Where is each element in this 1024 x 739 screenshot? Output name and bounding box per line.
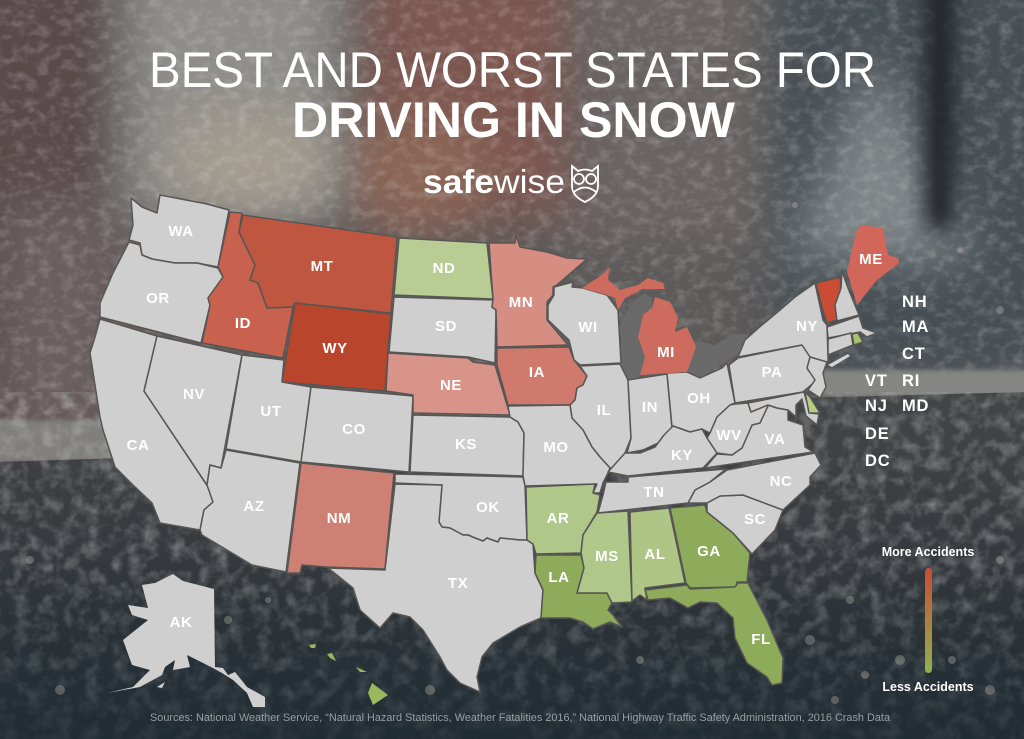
state: Iowa: IA bbox=[529, 364, 545, 381]
state: Wisconsin: WI bbox=[578, 319, 598, 336]
state: Wyoming: WY bbox=[322, 340, 348, 357]
state: New Mexico bbox=[287, 463, 394, 573]
state: Delaware bbox=[805, 392, 820, 413]
small state labels list: VT bbox=[865, 372, 888, 390]
state: Maine bbox=[847, 225, 899, 305]
state: Tennessee bbox=[598, 469, 726, 513]
state: California bbox=[90, 319, 213, 530]
state: Missouri bbox=[508, 405, 610, 493]
state: Virginia bbox=[705, 405, 813, 468]
state: South Carolina bbox=[707, 495, 783, 554]
state: Pennsylvania bbox=[729, 345, 817, 403]
state: Georgia bbox=[670, 505, 750, 588]
state: Oregon: OR bbox=[146, 290, 170, 307]
state: North Dakota bbox=[394, 238, 493, 299]
state: Michigan: MI bbox=[657, 344, 675, 361]
small state labels list: NJ bbox=[865, 397, 888, 415]
state: Iowa bbox=[497, 347, 587, 405]
state: Alabama: AL bbox=[644, 546, 666, 563]
state: Colorado bbox=[301, 387, 413, 472]
logo: safewise: safewise bbox=[423, 163, 565, 200]
state: Rhode Island bbox=[852, 333, 863, 345]
state: Texas bbox=[328, 484, 543, 692]
state: Illinois: IL bbox=[597, 402, 611, 419]
small state labels list: MD bbox=[902, 397, 929, 415]
small state labels list: DC bbox=[865, 452, 890, 470]
state: Wisconsin bbox=[548, 282, 621, 365]
state: Kentucky bbox=[608, 426, 717, 476]
state: Georgia: GA bbox=[697, 543, 721, 560]
small state labels list bbox=[865, 293, 929, 470]
state: Tennessee: TN bbox=[643, 484, 665, 501]
state: Virginia: VA bbox=[765, 431, 785, 448]
small state labels list: DE bbox=[865, 425, 890, 443]
title: BEST AND WORST STATES FOR bbox=[149, 42, 876, 98]
state: Alaska: AK bbox=[170, 614, 192, 631]
state: Hawaii bbox=[309, 644, 388, 705]
small state labels list: CT bbox=[902, 345, 926, 363]
state: South Carolina: SC bbox=[744, 511, 766, 528]
state: Idaho bbox=[202, 212, 293, 358]
state: Kansas bbox=[410, 415, 524, 476]
state: Maine: ME bbox=[859, 251, 883, 268]
map: lakes overlay bbox=[621, 293, 748, 380]
state: Idaho: ID bbox=[235, 315, 251, 332]
small state labels list: MA bbox=[902, 318, 929, 336]
state: Montana: MT bbox=[311, 258, 333, 275]
state: Pennsylvania: PA bbox=[762, 364, 782, 381]
state: Colorado: CO bbox=[342, 421, 366, 438]
state: Vermont bbox=[816, 277, 841, 323]
state: Arkansas bbox=[526, 484, 600, 554]
state: Maryland bbox=[748, 392, 819, 425]
state: Mississippi bbox=[577, 511, 632, 603]
small state labels list: RI bbox=[902, 372, 920, 390]
legend: accident scale bbox=[882, 545, 974, 694]
state: West Virginia: WV bbox=[716, 427, 742, 444]
state: South Dakota bbox=[389, 297, 496, 363]
state: Washington bbox=[129, 195, 229, 267]
state: Montana bbox=[239, 215, 397, 313]
state: Wyoming bbox=[282, 303, 391, 391]
state: Indiana bbox=[627, 374, 672, 453]
legend gradient bar bbox=[925, 568, 932, 673]
map: contiguous states bbox=[90, 195, 899, 692]
state: Louisiana bbox=[535, 555, 622, 629]
state: Alaska bbox=[107, 574, 265, 707]
state: New Jersey bbox=[807, 357, 827, 398]
state: Kentucky: KY bbox=[671, 447, 693, 464]
state: North Carolina bbox=[688, 453, 821, 510]
state: Alabama bbox=[630, 508, 685, 601]
state: New York: NY bbox=[796, 318, 818, 335]
state: Minnesota bbox=[489, 235, 587, 347]
state: Oklahoma bbox=[395, 474, 527, 542]
state: Washington: WA bbox=[168, 223, 194, 240]
state: Kansas: KS bbox=[455, 436, 477, 453]
state: Missouri: MO bbox=[543, 439, 569, 456]
state: Illinois bbox=[570, 364, 631, 473]
state: Massachusetts bbox=[827, 316, 877, 338]
state: Florida: FL bbox=[751, 631, 771, 648]
state: Nevada bbox=[144, 336, 242, 485]
title bbox=[149, 42, 876, 148]
state: Arizona: AZ bbox=[243, 498, 265, 515]
state: Ohio: OH bbox=[687, 390, 711, 407]
state: Minnesota: MN bbox=[509, 294, 533, 311]
title: DRIVING IN SNOW bbox=[292, 92, 736, 148]
state: Utah: UT bbox=[260, 403, 282, 420]
legend: accident scale: Less Accidents bbox=[882, 680, 974, 694]
state: Florida bbox=[645, 583, 783, 685]
state: New Mexico: NM bbox=[327, 510, 351, 527]
state: South Dakota: SD bbox=[435, 318, 457, 335]
state: Utah bbox=[226, 355, 311, 462]
state: Nevada: NV bbox=[183, 386, 205, 403]
legend: accident scale: More Accidents bbox=[882, 545, 974, 559]
state: Nebraska: NE bbox=[440, 377, 462, 394]
state: North Carolina: NC bbox=[770, 473, 792, 490]
state: Mississippi: MS bbox=[595, 548, 619, 565]
state: New Hampshire bbox=[835, 271, 859, 321]
state: Oregon bbox=[100, 242, 223, 343]
state: California: CA bbox=[127, 437, 149, 454]
state: Texas: TX bbox=[448, 575, 468, 592]
state: Connecticut bbox=[828, 333, 853, 355]
state: Michigan bbox=[582, 268, 696, 375]
state: West Virginia bbox=[707, 403, 768, 455]
state: Ohio bbox=[667, 363, 735, 433]
state: Louisiana: LA bbox=[548, 569, 570, 586]
state: Long Island bbox=[828, 354, 850, 367]
icon: owl bbox=[572, 166, 598, 202]
state: Indiana: IN bbox=[642, 399, 658, 416]
state: Arizona bbox=[200, 450, 300, 572]
sources footnote: Sources: National Weather Service, “Natural Hazard Statistics, Weather Fatalities 2016,” National Highway Traffic Safety Administration, 2016 Crash Data bbox=[150, 712, 891, 724]
state: North Dakota: ND bbox=[433, 260, 455, 277]
small state labels list: NH bbox=[902, 293, 927, 311]
state: Nebraska bbox=[386, 353, 510, 415]
state: Oklahoma: OK bbox=[476, 499, 500, 516]
state: New York bbox=[738, 283, 828, 363]
state: Arkansas: AR bbox=[547, 510, 569, 527]
